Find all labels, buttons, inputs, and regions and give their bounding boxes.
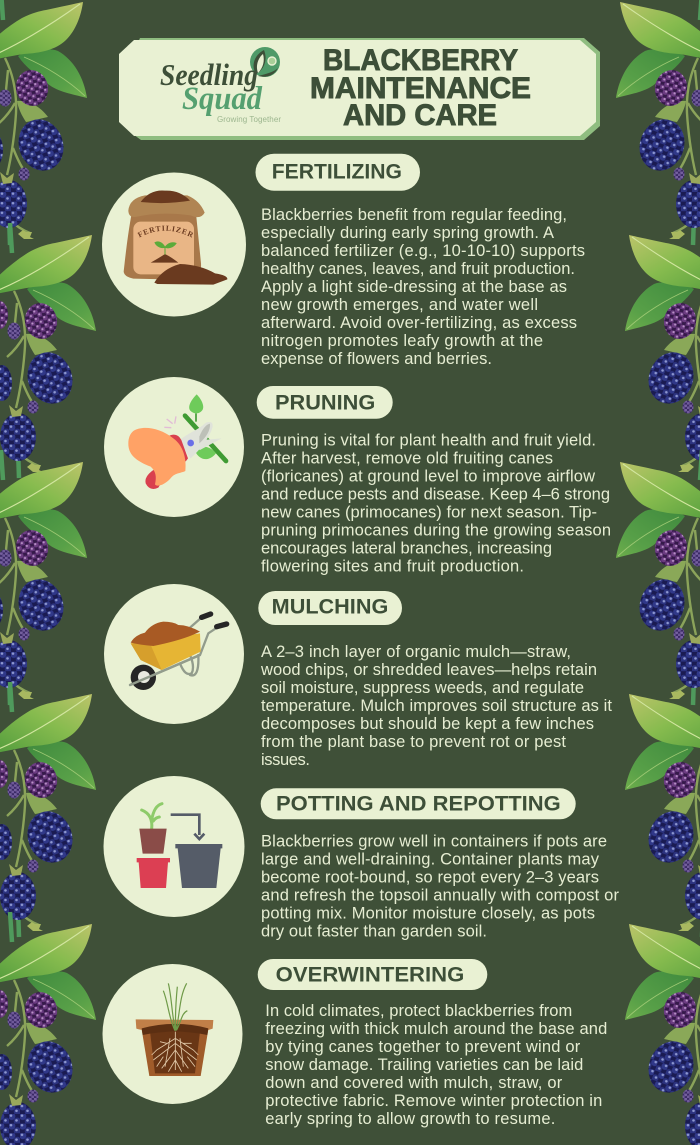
text: fertilizing: expense of flowers and berries. (261, 350, 492, 368)
text: overwintering: In cold climates, protect blackberries from (265, 1002, 572, 1020)
icon: potted plant with roots (102, 964, 242, 1104)
text: pruning: and reduce pests and disease. Keep 4–6 strong (261, 485, 610, 503)
heading: fertilizing (256, 154, 420, 191)
title text: MAINTENANCE (310, 72, 531, 105)
heading: overwintering: OVERWINTERING (276, 963, 464, 987)
text: potting and repotting: and refresh the topsoil annually with compost or (261, 887, 620, 905)
text: mulching: from the plant base to prevent rot or pest (261, 733, 566, 751)
text: overwintering: protective fabric. Remove winter protection in (265, 1092, 602, 1110)
text: overwintering: down and covered with mulch, straw, or (265, 1074, 563, 1092)
icon: hand with pruning shears (104, 377, 244, 517)
text: fertilizing (261, 206, 585, 368)
text: fertilizing: Apply a light side-dressing at the base as (261, 278, 567, 296)
text: pruning: pruning primocanes during the growing season (261, 521, 611, 539)
heading: mulching: MULCHING (272, 594, 388, 618)
icon: fertilizer bag (102, 172, 246, 316)
text: mulching: issues. (261, 751, 310, 769)
icon: fertilizer bag: FERTILIZER (137, 226, 193, 238)
text: fertilizing: healthy canes, leaves, and fruit production. (261, 260, 575, 278)
text: overwintering: by tying canes together to prevent wind or (265, 1038, 581, 1056)
text: fertilizing: especially during early spring growth. A (261, 224, 554, 242)
text: pruning: encourages lateral branches, increasing (261, 539, 552, 557)
text: pruning (261, 431, 611, 575)
logo: Seedling Squad: Seedling (160, 57, 258, 92)
heading: potting and repotting (261, 788, 576, 819)
text: fertilizing: Blackberries benefit from regular feeding, (261, 206, 567, 224)
text: mulching: temperature. Mulch improves soil structure as it (261, 697, 612, 715)
logo: Seedling Squad: Squad (182, 81, 262, 117)
text: fertilizing: nitrogen promotes leafy growth at the (261, 332, 543, 350)
panel: fertilizing (102, 154, 585, 368)
icon: pots with transfer arrow (104, 776, 244, 917)
text: fertilizing: balanced fertilizer (e.g., 10-10-10) supports (261, 242, 585, 260)
text: potting and repotting: large and well-draining. Container plants may (261, 851, 600, 869)
title text: AND CARE (343, 99, 497, 132)
text: potting and repotting: Blackberries grow well in containers if pots are (261, 833, 607, 851)
text: pruning: Pruning is vital for plant health and fruit yield. (261, 431, 596, 449)
text: mulching: decomposes but should be kept a few inches (261, 715, 594, 733)
logo: Seedling Squad: Growing Together (217, 115, 281, 124)
heading: overwintering (258, 959, 487, 990)
text: overwintering: freezing with thick mulch around the base and (265, 1020, 607, 1038)
heading: pruning: PRUNING (275, 390, 375, 414)
text: pruning: flowering sites and fruit production. (261, 557, 524, 575)
text: mulching: soil moisture, suppress weeds, and regulate (261, 679, 584, 697)
text: fertilizing: new growth emerges, and water well (261, 296, 538, 314)
text: potting and repotting: become root-bound, so repot every 2–3 years (261, 869, 599, 887)
panel: overwintering (102, 959, 607, 1128)
logo: Seedling Squad (160, 47, 281, 124)
text: mulching (260, 643, 612, 769)
title text (310, 44, 531, 132)
text: potting and repotting: potting mix. Monitor moisture closely, as pots (261, 905, 595, 923)
heading: potting and repotting: POTTING AND REPOTTING (276, 792, 561, 816)
right vine with leaves and blackberries (616, 0, 700, 1145)
heading: fertilizing: FERTILIZING (272, 159, 402, 183)
text: overwintering: early spring to allow growth to resume. (265, 1110, 555, 1128)
panel: mulching (104, 584, 612, 769)
text: mulching: A 2–3 inch layer of organic mulch—straw, (261, 643, 571, 661)
text: mulching: wood chips, or shredded leaves—helps retain (260, 661, 597, 679)
title text: BLACKBERRY (323, 44, 518, 77)
title banner (119, 38, 600, 140)
text: overwintering (265, 1002, 607, 1128)
icon: wheelbarrow with mulch (104, 584, 244, 724)
text: pruning: After harvest, remove old fruiting canes (261, 449, 553, 467)
text: potting and repotting (261, 833, 620, 941)
heading: pruning (257, 386, 393, 419)
heading: mulching (258, 591, 402, 625)
panel: potting and repotting (104, 776, 620, 941)
left vine with leaves and blackberries (0, 0, 96, 1145)
text: fertilizing: afterward. Avoid over-fertilizing, as excess (261, 314, 577, 332)
panel: pruning (104, 377, 611, 575)
text: pruning: (floricanes) at ground level to improve airflow (261, 467, 595, 485)
text: overwintering: snow damage. Trailing varieties can be laid (265, 1056, 583, 1074)
text: potting and repotting: dry out faster than garden soil. (261, 923, 487, 941)
text: pruning: new canes (primocanes) for next season. Tip- (261, 503, 597, 521)
